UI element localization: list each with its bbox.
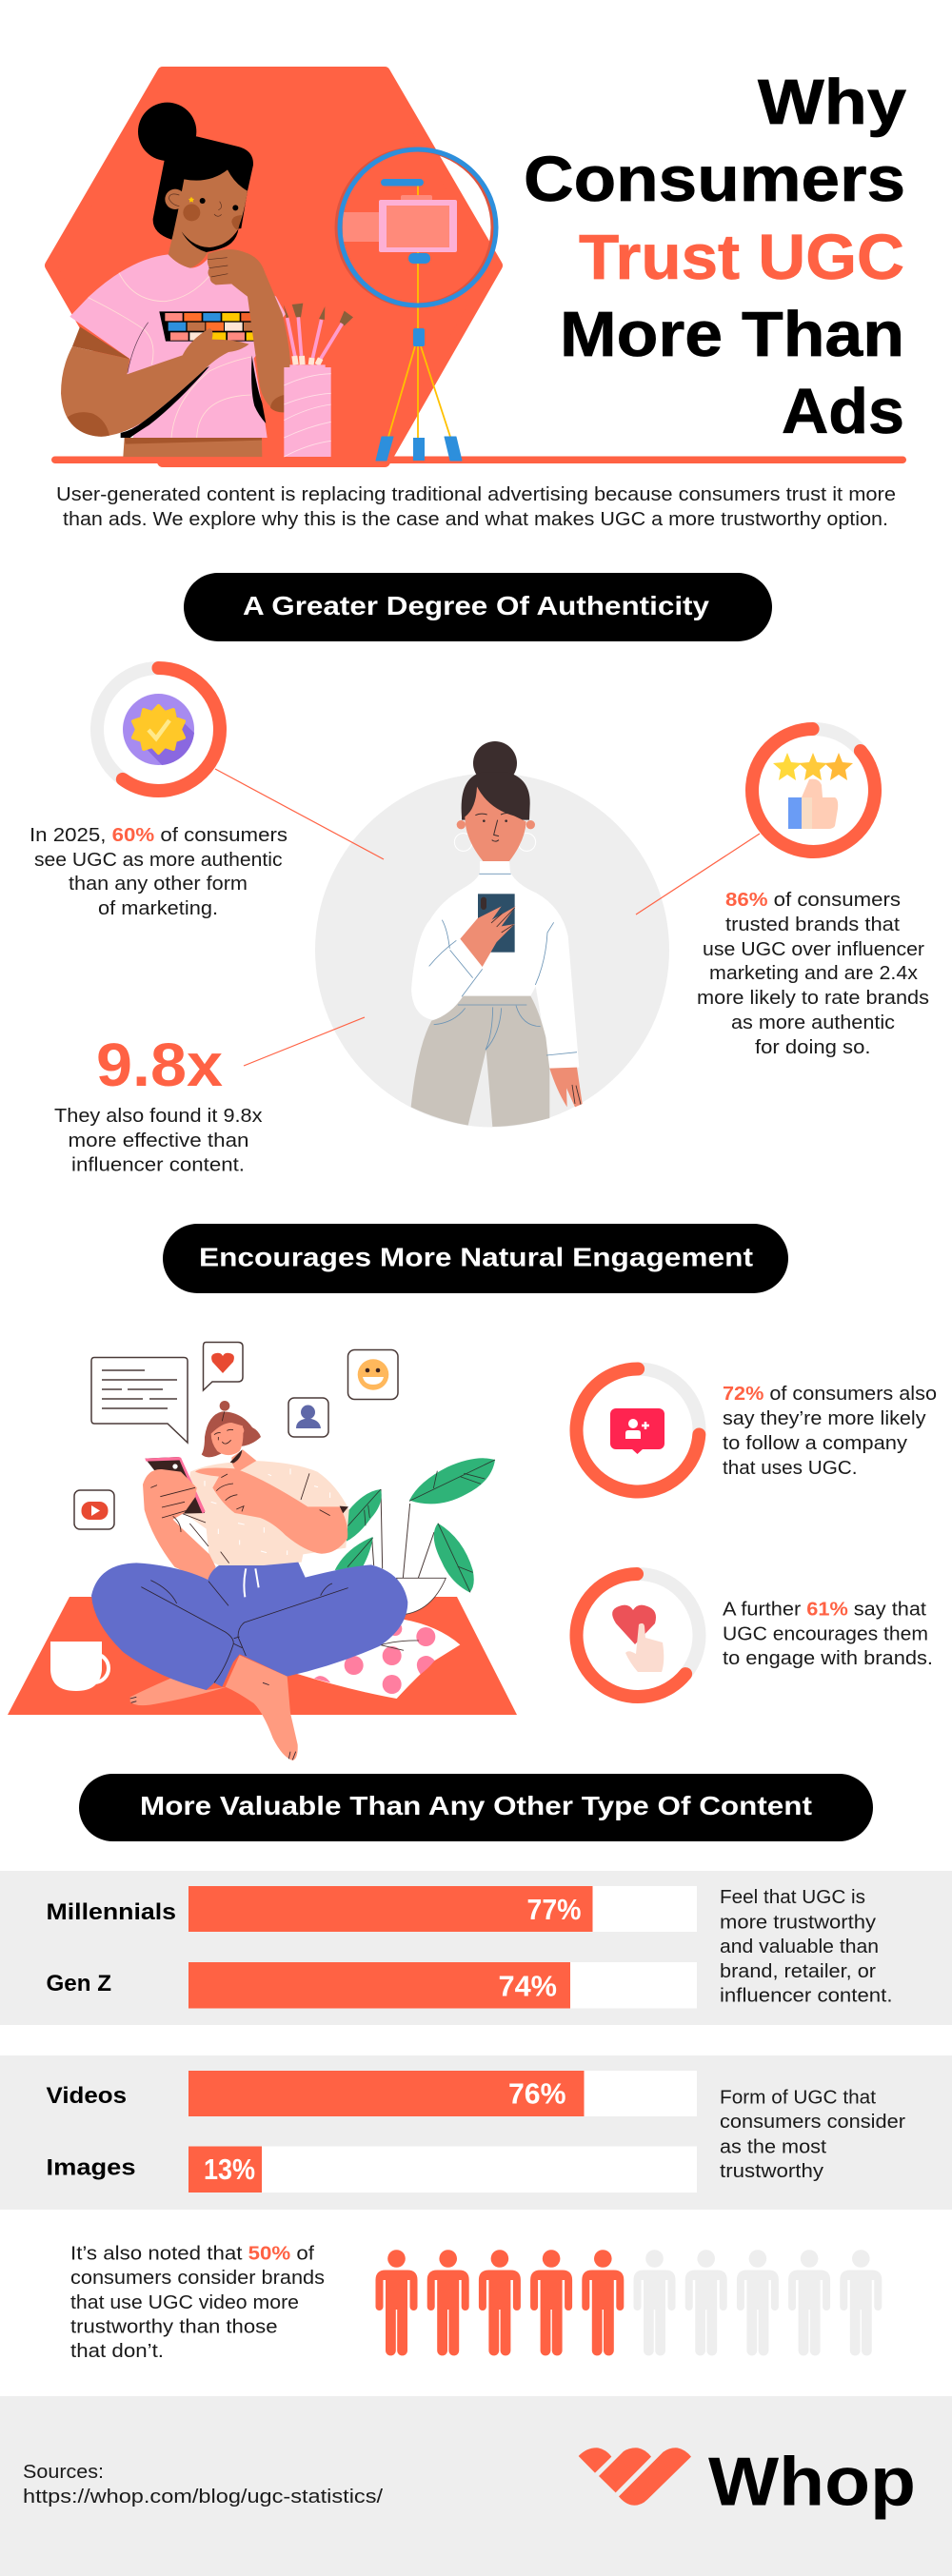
intro text [56, 484, 896, 530]
title: More Than [560, 299, 904, 370]
section heading: engagement: Encourages More Natural Engagement [199, 1243, 753, 1271]
text: 61% engage: to engage with brands. [723, 1648, 933, 1669]
red mat [8, 1597, 517, 1715]
legs [91, 1563, 407, 1760]
bar: videos: 76% [508, 2076, 565, 2111]
base bar [51, 457, 906, 463]
orange hexagon backdrop [50, 72, 497, 462]
text: 86% of consumers: 86% of consumers [725, 890, 901, 911]
text: 60% of consumers: than any other form [69, 874, 248, 895]
panel: generations bar chart [0, 1871, 952, 2025]
description: Feel that UGC is [720, 1887, 865, 1908]
description: as the most [720, 2137, 826, 2158]
description: more trustworthy [720, 1913, 876, 1934]
icon: video bubble [74, 1490, 114, 1529]
text: 9.8x more effective [54, 1106, 263, 1176]
bar: videos: Videos [46, 2083, 127, 2109]
logo: Whop: Whop [708, 2444, 916, 2520]
text: 60% of consumers: In 2025, 60% of consumers [30, 825, 288, 846]
intro text: than ads. We explore why this is the case and what makes UGC a more trustworthy option. [63, 509, 888, 530]
icon: person bubble [288, 1398, 328, 1437]
shirt [184, 1461, 349, 1565]
section heading: engagement [163, 1224, 788, 1293]
ring stat: 72% follow [572, 1365, 704, 1496]
bar: images [46, 2147, 697, 2193]
bar: gen z: Gen Z [46, 1971, 111, 1996]
pictogram: 5 of 10 people [375, 2250, 882, 2355]
text: 86% of consumers: trusted brands that [725, 914, 900, 935]
icon: heart bubble [204, 1342, 243, 1390]
mug [50, 1642, 109, 1691]
arms [143, 1468, 347, 1580]
section heading: authenticity: A Greater Degree Of Authenticity [243, 591, 710, 620]
plant [335, 1458, 495, 1615]
text: 60% of consumers [30, 825, 288, 919]
ring light and tripod [337, 149, 496, 461]
text: 50% video: that don’t. [70, 2341, 164, 2362]
icon: verified badge [123, 694, 194, 765]
description: trustworthy [720, 2161, 823, 2182]
neck and head [202, 1401, 261, 1472]
ring stat: 61% engage [551, 1549, 724, 1721]
bar: images: 13% [204, 2153, 255, 2186]
icon: stars and thumbs up [773, 753, 853, 829]
description: Form of UGC that [720, 2088, 876, 2109]
description [720, 2088, 905, 2182]
text: 50% video: trustworthy than those [70, 2316, 278, 2337]
icon: smiley bubble [348, 1349, 398, 1399]
description [720, 1887, 893, 2006]
phone [145, 1457, 206, 1514]
text: 60% of consumers: of marketing. [98, 898, 218, 919]
section heading: valuable: More Valuable Than Any Other Type Of Content [140, 1791, 812, 1820]
text: 61% engage [723, 1599, 933, 1669]
text: 60% of consumers: see UGC as more authentic [34, 850, 282, 871]
sources: Sources: [23, 2462, 104, 2483]
text: 50% video: consumers consider brands [70, 2268, 325, 2289]
text: 72% follow [723, 1384, 937, 1479]
title [524, 67, 906, 447]
text: 9.8x more effective: more effective than [69, 1131, 249, 1151]
text: 50% video [70, 2244, 325, 2362]
icon: follower notification [610, 1408, 664, 1454]
text: 9.8x more effective: They also found it 9.8x [54, 1106, 263, 1127]
text: 50% video: It’s also noted that 50% of [70, 2244, 314, 2265]
text: 72% follow: to follow a company [723, 1433, 907, 1454]
text: 61% engage: UGC encourages them [723, 1623, 928, 1644]
engagement illustration: woman on mat with phone [8, 1342, 517, 1760]
brushes and pot [284, 304, 353, 457]
text: 86% of consumers: more likely to rate brands [697, 988, 929, 1009]
description: and valuable than [720, 1937, 879, 1957]
text: 61% engage: A further 61% say that [723, 1599, 926, 1620]
bar: millennials: Millennials [46, 1899, 176, 1925]
title: Trust UGC [579, 222, 904, 293]
text: 86% of consumers [697, 890, 929, 1058]
pillow [295, 1620, 460, 1699]
description: brand, retailer, or [720, 1961, 876, 1982]
text: 72% follow: 72% of consumers also [723, 1384, 937, 1405]
bar: millennials [46, 1886, 697, 1932]
logo: Whop [579, 2444, 916, 2520]
sources: https://whop.com/blog/ugc-statistics/ [23, 2487, 384, 2507]
title: Why [758, 67, 906, 138]
section heading: valuable [79, 1774, 873, 1841]
description: influencer content. [720, 1985, 893, 2006]
ring stat: 86% trust [727, 704, 900, 876]
make-up palette [159, 311, 268, 342]
text: 72% follow: say they’re more likely [723, 1408, 925, 1429]
text: 86% of consumers: use UGC over influencer [703, 939, 924, 960]
bar: images: Images [46, 2154, 135, 2181]
bar: gen z: 74% [499, 1970, 557, 2002]
panel: formats bar chart [0, 2055, 952, 2210]
description: consumers consider [720, 2112, 905, 2133]
sources [23, 2462, 384, 2507]
footer [0, 2396, 952, 2576]
text: 86% of consumers: marketing and are 2.4x [709, 963, 918, 984]
ring stat: 60% authentic [97, 668, 220, 791]
bar: gen z [46, 1962, 697, 2008]
text: 50% video: that use UGC video more [70, 2292, 299, 2313]
section heading: authenticity [184, 573, 772, 641]
title: Consumers [524, 144, 905, 215]
bar: millennials: 77% [527, 1893, 581, 1926]
connector lines [215, 769, 760, 1066]
bar: videos [46, 2071, 697, 2116]
icon: speech bubble with text lines [91, 1357, 188, 1443]
header illustration: woman with make-up palette and ring light [50, 72, 906, 463]
intro text: User-generated content is replacing traditional advertising because consumers trust it more [56, 484, 896, 505]
text: 72% follow: that uses UGC. [723, 1458, 857, 1479]
big stat: 9.8x: 9.8x [96, 1031, 223, 1099]
text: 86% of consumers: for doing so. [755, 1037, 870, 1058]
title: Ads [782, 376, 904, 447]
text: 86% of consumers: as more authentic [731, 1013, 895, 1033]
icon: heart and pointing hand [612, 1605, 664, 1672]
text: 9.8x more effective: influencer content. [71, 1155, 245, 1176]
woman figure [61, 103, 353, 457]
central grey circle with woman holding phone [315, 741, 669, 1127]
